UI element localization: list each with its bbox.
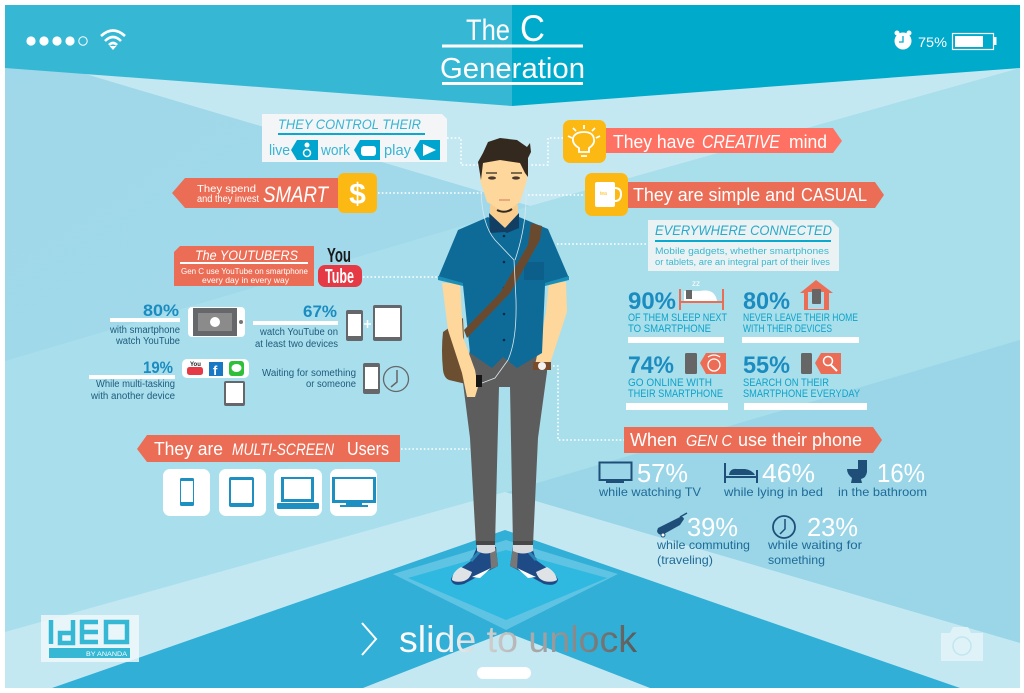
banner: when gen c use their phone xyxy=(624,427,882,453)
panel: they control their xyxy=(262,114,447,162)
stat: 23% while waiting: 23% xyxy=(807,512,858,542)
stat: 80% smartphone: with smartphone xyxy=(109,325,180,336)
home button xyxy=(477,667,531,679)
stat: 80% home: 80% xyxy=(743,288,790,315)
banner: creative mind: CREATIVE xyxy=(702,132,781,152)
stat: 39% while commuting: while commuting xyxy=(656,538,750,552)
icon: tea cup xyxy=(585,173,628,216)
panel: they control their: play xyxy=(384,142,411,159)
banner: when gen c use their phone: use their phone xyxy=(738,430,862,450)
panel: they control their: THEY CONTROL THEIR xyxy=(278,116,421,132)
icon: social apps on tablet: You xyxy=(190,362,201,368)
stat: 67% two devices: at least two devices xyxy=(255,339,338,350)
banner: smart xyxy=(172,173,377,213)
stat: 55% search: 55% xyxy=(743,352,790,379)
banner: smart: They spend xyxy=(197,184,256,195)
banner: smart: $ xyxy=(349,178,366,211)
icon: youtube logo xyxy=(318,245,362,288)
banner: multi-screen users: MULTI-SCREEN xyxy=(232,440,335,459)
icon: phone with globe tag xyxy=(685,353,726,374)
text: waiting for something: or someone xyxy=(306,379,356,390)
bag strap xyxy=(464,223,542,338)
panel: the youtubers: Gen C use YouTube on smartphone xyxy=(181,267,309,276)
title: The xyxy=(466,14,510,47)
stat: 80% home xyxy=(742,288,859,343)
icon: chevron xyxy=(362,623,376,655)
stat: 39% while commuting: (traveling) xyxy=(657,553,713,567)
banner: when gen c use their phone: When xyxy=(630,430,677,450)
stat: 90% sleep xyxy=(628,288,727,343)
pocket xyxy=(524,262,544,280)
stat: 19% multi-tasking: While multi-tasking xyxy=(96,379,175,390)
stat: 67% two devices xyxy=(253,302,338,350)
banner: creative mind xyxy=(606,128,842,153)
icon: bed xyxy=(680,279,723,310)
right arm xyxy=(534,282,567,370)
bag xyxy=(442,318,466,384)
stat: 90% sleep: OF THEM SLEEP NEXT xyxy=(628,312,727,324)
icon: phone and clock xyxy=(363,363,408,394)
stat: 23% while waiting: while waiting for xyxy=(767,538,862,552)
banner: simple and casual xyxy=(628,182,884,208)
face xyxy=(480,154,527,213)
stat: 55% search: SEARCH ON THEIR xyxy=(743,377,829,389)
stat: 80% home: WITH THEIR DEVICES xyxy=(743,323,832,335)
stat: 46% lying in bed: while lying in bed xyxy=(723,485,823,499)
panel: everywhere connected: Mobile gadgets, whether smartphones xyxy=(655,246,830,256)
stat: 55% search: SMARTPHONE EVERYDAY xyxy=(743,388,861,400)
banner: when gen c use their phone: GEN C xyxy=(686,433,732,450)
icon: light bulb xyxy=(563,120,606,163)
stat: 74% online: THEIR SMARTPHONE xyxy=(628,388,723,400)
stat: 39% while commuting: 39% xyxy=(687,512,738,542)
icon: phone with search tag xyxy=(801,353,841,374)
stat: 57% watching tv: 57% xyxy=(637,458,688,488)
stat: 80% smartphone: watch YouTube xyxy=(115,336,180,347)
panel: everywhere connected: or tablets, are an integral part of their lives xyxy=(655,257,831,267)
title: Generation xyxy=(440,53,585,85)
banner: smart: SMART xyxy=(263,182,329,207)
stat: 67% two devices: 67% xyxy=(303,302,337,321)
banner: simple and casual: CASUAL xyxy=(801,185,867,205)
stat: 80% home: NEVER LEAVE THEIR HOME xyxy=(743,312,858,324)
logo: IDEO by Ananda xyxy=(41,615,139,662)
stat: 16% in the bathroom: 16% xyxy=(877,458,925,488)
device cards xyxy=(163,469,377,516)
left shoe xyxy=(451,545,498,585)
panel: the youtubers: every day in every way xyxy=(202,276,289,285)
panel: the youtubers: The YOUTUBERS xyxy=(195,247,299,263)
stat: 80% smartphone: 80% xyxy=(143,301,179,320)
collar xyxy=(489,213,519,233)
slide to unlock: slide to unlock xyxy=(399,619,638,660)
sleeve cuffs xyxy=(438,276,569,286)
right shoe xyxy=(510,545,558,585)
earphone cables xyxy=(481,190,526,383)
title: C xyxy=(520,8,545,49)
neck xyxy=(490,205,518,232)
stat: 57% watching tv xyxy=(598,458,701,499)
panel: everywhere connected: EVERYWHERE CONNECTED xyxy=(655,222,832,238)
stat: 16% in the bathroom: in the bathroom xyxy=(838,485,927,499)
icon: house with phone xyxy=(800,280,833,310)
stat: 39% while commuting xyxy=(656,512,750,567)
banner: smart: and they invest xyxy=(197,194,259,205)
stat: 23% while waiting xyxy=(767,512,862,567)
wristwatch xyxy=(533,362,551,370)
stat: 57% watching tv: while watching TV xyxy=(598,485,701,499)
stat: 46% lying in bed xyxy=(723,458,823,499)
floor diamond xyxy=(393,540,618,630)
banner: multi-screen users: Users xyxy=(347,439,389,459)
panel: everywhere connected xyxy=(648,220,839,271)
title xyxy=(440,8,585,85)
banner: creative mind: mind xyxy=(789,132,827,152)
icon: phone with film xyxy=(188,307,245,337)
icon: phone plus tablet xyxy=(346,305,402,341)
trouser hems xyxy=(476,541,533,545)
stat: 90% sleep: 90% xyxy=(628,288,676,315)
logo: IDEO by Ananda: BY ANANDA xyxy=(86,652,127,658)
stat: 74% online xyxy=(626,352,728,410)
icon: alarm clock xyxy=(894,30,912,50)
stat: 19% multi-tasking: with another device xyxy=(90,391,175,402)
stat: 19% multi-tasking xyxy=(89,358,175,402)
person illustration xyxy=(438,138,569,585)
hair xyxy=(478,138,531,180)
eyes and mouth xyxy=(486,173,522,212)
icon: battery xyxy=(952,34,996,50)
icon: wifi xyxy=(101,30,125,50)
icon: youtube logo: You xyxy=(327,245,351,267)
icon: bed: zz xyxy=(692,279,700,288)
phone in hand xyxy=(476,375,482,387)
stat: 74% online: 74% xyxy=(628,352,674,379)
stat: 80% smartphone xyxy=(109,301,180,347)
connector dotted lines xyxy=(363,138,648,449)
icon: youtube logo: Tube xyxy=(325,266,354,288)
icon: social apps on tablet: f xyxy=(213,363,218,378)
shirt xyxy=(438,217,569,368)
stat: 46% lying in bed: 46% xyxy=(762,458,815,488)
panel: they control their: live xyxy=(269,142,290,159)
stat: 74% online: GO ONLINE WITH xyxy=(628,377,712,389)
panel: they control their: work xyxy=(320,142,350,159)
header bar xyxy=(5,5,1020,106)
stat: 67% two devices: watch YouTube on xyxy=(259,327,338,338)
icon: camera xyxy=(941,627,983,661)
stat: 90% sleep: TO SMARTPHONE xyxy=(628,323,711,335)
text: waiting for something xyxy=(262,368,356,390)
banner: creative mind: They have xyxy=(613,132,695,152)
stat: 19% multi-tasking: 19% xyxy=(143,358,173,377)
text: waiting for something: Waiting for something xyxy=(262,368,356,379)
icon: social apps on tablet xyxy=(182,359,249,406)
shirt buttons xyxy=(503,235,505,341)
stat: 16% in the bathroom xyxy=(838,458,927,499)
icon: tea cup: tea xyxy=(600,191,607,197)
panel: the youtubers xyxy=(174,246,314,286)
stat: 55% search xyxy=(743,352,867,410)
legs xyxy=(463,350,547,545)
status icons: signal dots xyxy=(26,36,87,46)
left arm and hand xyxy=(442,283,478,397)
banner: multi-screen users: They are xyxy=(154,439,223,459)
stat: 23% while waiting: something xyxy=(768,553,825,567)
battery percentage: 75% xyxy=(918,34,947,50)
banner: multi-screen users xyxy=(137,435,400,462)
banner: simple and casual: They are simple and xyxy=(633,185,795,205)
